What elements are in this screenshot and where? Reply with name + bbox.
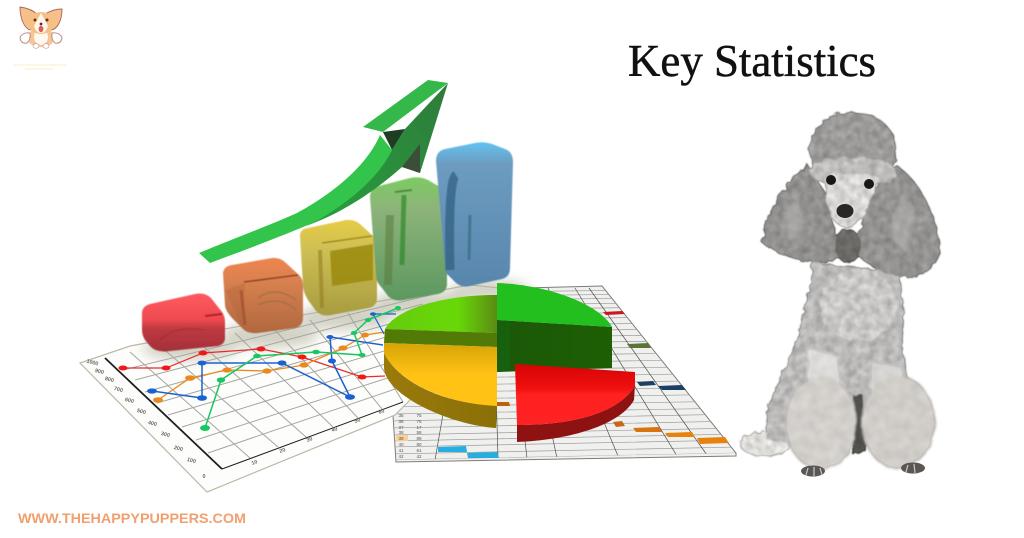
corgi face	[34, 18, 36, 22]
growth arrow	[199, 80, 448, 263]
gap between legs	[852, 395, 866, 454]
axis labels: 600	[124, 397, 134, 405]
chart axes	[105, 358, 403, 469]
axis labels: 1000	[86, 359, 99, 367]
corgi head	[28, 12, 54, 34]
spreadsheet row numbers: 40	[398, 442, 404, 447]
axis labels: 700	[113, 386, 123, 394]
chart grid	[123, 295, 430, 458]
arrow head	[363, 80, 448, 132]
axis labels: 0	[202, 474, 206, 480]
axis labels: 20	[279, 447, 287, 455]
line chart sheet	[80, 280, 530, 492]
axis labels: 300	[160, 431, 170, 439]
spreadsheet row numbers: 41	[398, 448, 404, 453]
neck shadow	[835, 229, 861, 263]
axis labels: 50	[354, 417, 362, 425]
green data line	[200, 306, 401, 431]
spreadsheet row numbers: 58	[416, 430, 422, 435]
left ear	[762, 163, 842, 262]
axis labels: 900	[94, 368, 104, 376]
orange bar	[223, 258, 303, 333]
axis labels: 500	[136, 408, 146, 416]
blue data line	[147, 312, 396, 401]
orange data line	[153, 332, 385, 403]
topknot	[809, 112, 897, 188]
eyes	[826, 175, 874, 189]
spreadsheet row numbers: 42	[398, 454, 404, 459]
bar shadows on the sheet	[142, 280, 530, 360]
coloured spreadsheet cells	[396, 311, 729, 458]
nose	[836, 204, 854, 218]
blue bar	[436, 142, 513, 286]
corgi paws	[20, 33, 30, 43]
axis labels: 400	[147, 420, 157, 428]
axis labels: 60	[378, 408, 386, 416]
poodle fur mass	[740, 112, 940, 457]
bar chart: 3D glossy bars	[142, 142, 513, 351]
yellow bar	[300, 220, 377, 316]
body	[765, 262, 912, 445]
tail	[740, 431, 790, 457]
pie chart	[384, 283, 635, 442]
axis labels: 100	[186, 457, 196, 465]
spreadsheet row numbers: 36	[398, 419, 404, 424]
spreadsheet sheet	[390, 286, 740, 462]
axis labels	[86, 359, 386, 480]
dark green slice top	[497, 283, 612, 327]
spreadsheet row numbers: 76	[416, 419, 422, 424]
spreadsheet row numbers: 38	[398, 430, 404, 435]
face	[824, 173, 880, 228]
spreadsheet row numbers: 61	[416, 448, 422, 453]
logo: corgi	[20, 7, 62, 48]
yellow slice	[384, 353, 497, 428]
red bar	[142, 294, 225, 351]
spreadsheet row numbers	[398, 413, 422, 459]
dark green slice side	[497, 320, 612, 372]
axis labels: 10	[251, 459, 259, 467]
spreadsheet row numbers: 89	[416, 436, 422, 441]
axis labels: 30	[306, 436, 314, 444]
title: Key Statistics	[628, 36, 876, 86]
axis labels: 40	[331, 426, 339, 434]
right ear	[853, 165, 940, 277]
website url: WWW.THEHAPPYPUPPERS.COM	[18, 510, 246, 526]
spreadsheet row numbers: 17	[416, 425, 422, 430]
corgi ears	[20, 7, 38, 30]
red slice	[517, 385, 635, 442]
spreadsheet row numbers: 80	[416, 442, 422, 447]
paws	[801, 462, 925, 476]
corgi body	[29, 30, 53, 47]
spreadsheet row numbers: 39	[398, 436, 404, 441]
spreadsheet row numbers: 75	[416, 413, 422, 418]
spreadsheet row numbers: 35	[398, 413, 404, 418]
axis labels: 200	[173, 445, 183, 453]
legs and paw poms	[785, 347, 935, 470]
poodle photo illustration	[740, 112, 940, 476]
ear highlights	[784, 201, 913, 249]
green bar	[370, 177, 447, 300]
spreadsheet row numbers: 42	[416, 454, 422, 459]
arrow underside	[306, 83, 448, 226]
spreadsheet row numbers: 37	[398, 425, 404, 430]
red data line	[118, 346, 385, 380]
light green slice	[385, 295, 497, 333]
axis labels: 800	[104, 376, 114, 384]
arrow shaft	[199, 135, 392, 263]
